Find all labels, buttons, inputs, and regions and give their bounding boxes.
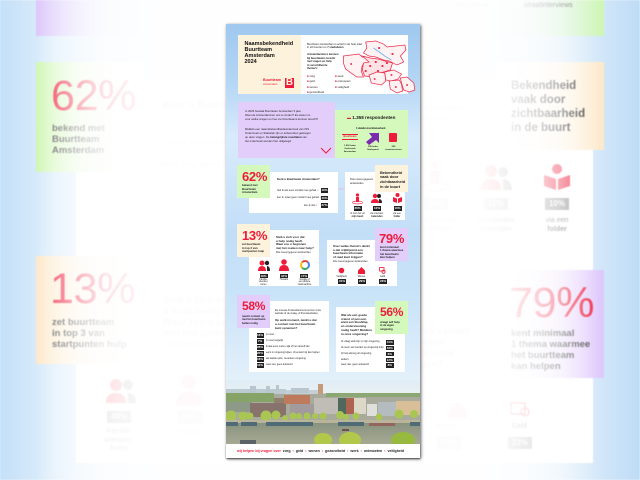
- response sources heading: 3 databronnen/kanaalverk: [356, 127, 386, 130]
- blurred background: woorden: [420, 116, 447, 123]
- question: of raad kunt krijgen?: [333, 255, 363, 259]
- panel: title: [238, 35, 301, 94]
- blurred background: mijn buurt: [422, 226, 453, 232]
- respondents count: ▬ 1.358 respondenten: [347, 115, 395, 120]
- panel: 79%: kent minimaal: [380, 244, 399, 248]
- background panel: 79%: kan helpen: [511, 361, 561, 372]
- labels: [350, 212, 365, 218]
- card: thema's: 23%: [380, 279, 386, 283]
- background panel: 62%: [36, 62, 145, 172]
- panel: 56%: vraagt zelf hulp: [380, 320, 400, 324]
- panel: map and themes: ■ gezondheid: [307, 90, 324, 94]
- card: thema's: Drie meest gegeven antwoorden: [333, 260, 368, 263]
- blurred background: Huisarts: [174, 428, 200, 435]
- card: contact opnemen: [249, 301, 329, 372]
- caption: Buurtteam: [242, 187, 256, 191]
- blurred background: Geld: [512, 423, 527, 430]
- heading: 2024: [244, 59, 257, 65]
- caption: bekend met: [242, 183, 258, 187]
- icon: geld: [379, 267, 386, 274]
- theme list: ■ ontmoeten: [335, 79, 351, 83]
- panel: map and themes: Amsterdammers kunnen: [307, 53, 339, 56]
- panel: 13%: 13%: [242, 228, 267, 242]
- footer tagline: [226, 444, 420, 458]
- source: stadspanel: Stadspanel: [367, 149, 379, 151]
- background panel: Bekendheid: zichtbaarheid: [511, 108, 585, 120]
- source: buurtteam: Buurtteam: [344, 135, 356, 138]
- source: straatinterviews: 300: [392, 146, 395, 148]
- icon: huisarts: [279, 259, 289, 271]
- blurred background: Drie meest gegeven antwoorden: [163, 341, 264, 348]
- card: kent u buurtteam: ken ik, maar geen contact mee gehad ✓: [277, 196, 322, 199]
- panel: intro: Middels een naamsbekendheidsonderzoek van OIS: [245, 126, 309, 130]
- intro: De meeste Amsterdammers kennen onze: [275, 309, 321, 312]
- panel: 79%: 79%: [379, 231, 404, 246]
- card: kent u buurtteam: 37%: [321, 203, 328, 207]
- source: buurtteam: Amsterdam: [344, 151, 356, 153]
- panel: 79%: 1 thema waarmee: [380, 248, 403, 252]
- panel: 79%: kan helpen: [380, 255, 395, 259]
- question: [341, 313, 372, 336]
- question: met het zoeken naar hulp?: [276, 246, 314, 250]
- connector line: [338, 188, 345, 190]
- panel: 13%: startpunten hulp: [242, 249, 264, 253]
- background panel: Bekendheid: vaak door: [511, 94, 565, 106]
- question: Op welk moment, denkt u dat: [275, 318, 317, 322]
- question: [333, 244, 370, 259]
- panel: 56%: [375, 301, 408, 334]
- badges: 16%: [321, 188, 328, 192]
- question: nodig heeft? Meldenu: [341, 328, 372, 332]
- question: u contact met het buurtteam: [275, 322, 315, 326]
- panel: intro: op deze vragen. De belangrijkste resultaten van: [245, 135, 307, 139]
- panel: map and themes: in verschillende: [307, 64, 327, 66]
- answer rows: 16%: [257, 333, 263, 337]
- card: startpunt hulp: Drie meest gegeven antwoorden: [276, 251, 311, 254]
- blurred background: Wonen: [437, 423, 459, 430]
- answer rows: heb ik wel eens contact mee gehad ✓: [277, 188, 319, 192]
- card: startpunt hulp: zoekmachine: [298, 284, 311, 286]
- card: thema's: Wonen: [358, 275, 365, 278]
- card: contact opnemen: 7%: [258, 339, 262, 343]
- background panel: 13%: zet buurtteam: [52, 317, 114, 328]
- card: kent u buurtteam: [249, 172, 338, 213]
- question: [275, 318, 317, 330]
- background panel: Bekendheid: [495, 62, 604, 150]
- blurred background: bekenden: [481, 226, 511, 232]
- card: hulp omgeving: Ik help alsnog uit omgeving: [341, 352, 371, 354]
- panel: 56%: in de eigen: [380, 324, 394, 327]
- panel: 58%: 58%: [242, 299, 265, 313]
- card: zichtbaarheid: via vrienden,: [370, 212, 384, 215]
- panel: 13%: [237, 224, 270, 257]
- card: zichtbaarheid: folder: [394, 215, 400, 218]
- blurred background: via vrienden,: [476, 217, 516, 224]
- background labels: Familie,: [107, 428, 131, 435]
- theme list: ■ zorg: [307, 74, 315, 78]
- answer rows: Ik vraag welk zijn in mijn omgeving: [341, 340, 380, 343]
- card: contact opnemen: als laatste optie, na andere omgeving: [266, 357, 306, 360]
- question: u hulp nodig heeft.: [276, 239, 303, 243]
- background panel: 79%: 1 thema waarmee: [511, 339, 590, 350]
- panel: 79%: het buurtteam: [380, 252, 399, 256]
- background panel: 79%: 79%: [509, 279, 594, 327]
- photo: Amsterdam skyline: [226, 380, 420, 444]
- logo: Buurtteam: [263, 78, 281, 82]
- icon: folder: [393, 193, 402, 203]
- question: Waar zou u beginnen: [276, 242, 306, 246]
- background text: questions: Kent u Buurtteam Amsterdam?: [163, 100, 310, 111]
- labels: Familie,: [259, 278, 268, 280]
- question: kunt opnemen?: [275, 326, 297, 330]
- card: kent u buurtteam: 46%: [321, 196, 328, 200]
- background panel: 13%: startpunten hulp: [52, 339, 127, 350]
- blurred background: heb ik wel eens contact mee gehad: [168, 139, 278, 146]
- background badges: 49%: [111, 412, 127, 421]
- logo: [263, 77, 294, 88]
- card: zichtbaarheid: via een: [393, 212, 401, 215]
- card: startpunt hulp: [249, 230, 319, 286]
- question: en ondersteuning: [341, 324, 366, 328]
- source: stadspanel: 398 leden: [368, 146, 378, 148]
- card: contact opnemen: eerst in omgeving kijken, of iemand mij kan helpen: [266, 351, 320, 354]
- logo: Amsterdam: [263, 82, 277, 86]
- blurred background: meest gegeven: [420, 105, 468, 112]
- card: hulp omgeving: 41%: [387, 340, 393, 344]
- panel: 79%: [375, 228, 408, 261]
- theme list: ■ geld: [307, 79, 315, 83]
- source: stadspanel: [366, 133, 379, 151]
- answer note: antwoorden: [350, 182, 364, 185]
- badges: 36%: [354, 206, 360, 210]
- intro paragraphs: In 2024 bestaat Buurtteam Amsterdam 5 jaar.: [245, 108, 301, 112]
- caption: [242, 183, 258, 194]
- blurred background: Stelt u zich voor dat: [163, 295, 253, 306]
- theme list: ■ wonen: [307, 85, 318, 89]
- panel: bekendheid: [375, 165, 408, 192]
- background panel: 79%: het buurtteam: [511, 350, 574, 361]
- blurred background: met het zoeken?: [163, 328, 237, 339]
- badges: 31%: [339, 279, 345, 283]
- blurred background: ma's denkt: [420, 326, 469, 337]
- blurred background: 23%: [512, 438, 528, 447]
- background panel: 13%: in top 3 van: [52, 328, 105, 339]
- intro text: Buurtteam Amsterdam is actief in de hele stad: [307, 42, 362, 46]
- stat: 62%: [242, 168, 267, 184]
- labels: Ik zien het uit: [350, 212, 365, 215]
- icon: zien in buurt: [352, 193, 363, 204]
- theme list: ■ werk: [335, 74, 343, 78]
- card: zichtbaarheid: 12%: [374, 206, 380, 210]
- background labels: vrienden,: [105, 436, 133, 444]
- panel: bekendheid: vaak door: [380, 174, 398, 179]
- question: Wat als een goede: [341, 313, 367, 317]
- badges: 49%: [260, 274, 266, 278]
- question: vriend of persoon: [341, 317, 366, 321]
- panel: 62%: [237, 165, 270, 198]
- heading: Amsterdam: [244, 53, 275, 59]
- source: straatinterviews: straatinterviews: [385, 149, 402, 151]
- caption: Amsterdam: [242, 190, 257, 194]
- card: zichtbaarheid: 10%: [394, 206, 400, 210]
- blurred background: Stadspanel: [453, 2, 488, 9]
- panel: 58%: met het buurtteam: [242, 318, 265, 321]
- map of Amsterdam: [342, 40, 416, 94]
- background panel: Bekendheid: in de buurt: [511, 122, 570, 134]
- background white cards: [76, 80, 593, 463]
- card: contact opnemen: weet niet, geen antwoord: [266, 363, 293, 366]
- card: startpunt hulp: 34%: [281, 274, 287, 278]
- panel: map and themes: thema's:: [307, 67, 318, 70]
- panel: intro: [238, 102, 335, 158]
- source: buurtteam: 1.000 leden: [344, 145, 356, 147]
- blurred background: folder: [547, 226, 567, 232]
- card: startpunt hulp: Huisarts: [280, 278, 288, 280]
- blurred background: zien het uit: [422, 217, 456, 224]
- answer note: Drie meest gegeven: [350, 178, 373, 181]
- intro: [275, 309, 321, 315]
- background panel: 62%: Amsterdam: [52, 145, 104, 156]
- source: buurtteam: Onderzoek: [344, 148, 356, 150]
- background panel: 62%: Buurtteam: [52, 134, 100, 145]
- background panel: 62%: 62%: [51, 72, 136, 120]
- badges: [338, 279, 346, 284]
- panel: 56%: 56%: [380, 305, 403, 319]
- panel: 58%: neemt contact op: [242, 314, 264, 318]
- background panel: green strip: [484, 0, 604, 36]
- question: want een klus/klap,: [341, 320, 368, 324]
- card: contact opnemen: zo snel...: [266, 333, 276, 336]
- question: u dat vrijblijvend een: [333, 248, 363, 252]
- blurred background: gen?: [420, 359, 443, 370]
- badges: [260, 274, 268, 278]
- question: buurtteam informatie: [333, 251, 363, 255]
- labels: Veiligheid: [336, 275, 347, 278]
- intro text: [307, 42, 362, 49]
- icon: wonen: [358, 267, 365, 274]
- panel: bekendheid: in de buurt: [380, 184, 400, 189]
- panel: map and themes: bij buurtteams terecht: [307, 56, 335, 60]
- panel: 58%: [237, 295, 270, 328]
- labels: buren: [261, 284, 266, 286]
- panel: map and themes: met vragen en hulp: [307, 60, 332, 63]
- card: thema's: 29%: [359, 279, 365, 283]
- source: straatinterviews: [385, 133, 402, 151]
- blurred background: ken ik, maar geen contact mee gehad: [160, 162, 277, 169]
- card: contact opnemen: 18%: [257, 357, 263, 361]
- panel: respondents: [335, 110, 408, 158]
- theme list: ■ veiligheid: [335, 85, 349, 89]
- card: contact opnemen: 28%: [257, 345, 263, 349]
- blurred background: straatinterviews: [524, 2, 573, 9]
- card: zichtbaarheid: [345, 172, 405, 220]
- answer note: [350, 178, 374, 185]
- panel: bekendheid: Bekendheid: [380, 170, 402, 174]
- panel: map and themes: [301, 35, 408, 94]
- card: contact opnemen: zo snel mogelijk: [266, 339, 283, 342]
- background labels: buren: [110, 445, 128, 452]
- card: contact opnemen: ik laat even rusten, kijk of het vanzelf lukt: [266, 345, 309, 348]
- intro text: in 22 buurten en 7 stadsdelen: [307, 46, 343, 49]
- background panel: 62%: bekend met: [52, 123, 105, 134]
- blurred background: tteam: [420, 337, 445, 348]
- heading: [244, 41, 293, 65]
- card: hulp omgeving: weet niet, geen antwoord: [341, 363, 369, 366]
- question: Stelt u zich voor dat: [276, 235, 305, 239]
- labels: [258, 278, 268, 286]
- heading: Buurtteam: [244, 47, 272, 53]
- intro: website of de vraag- of themawebsites.: [275, 312, 318, 315]
- background panel: 79%: [495, 270, 604, 378]
- card: hulp omgeving: Ik neem wel contact op omgeving hulp: [341, 346, 384, 348]
- footer tagline: wij helpen bij vragen over zorg ▪ geld ▪ wonen ▪ gezondheid ▪ werk ▪ ontmoeten ▪ veiligheid: [237, 449, 404, 453]
- card: kent u buurtteam: ken ik niet ×: [304, 204, 317, 206]
- panel: 13%: zet buurtteam: [242, 242, 260, 246]
- question: Kent u Buurtteam Amsterdam?: [277, 176, 320, 180]
- labels: mijn buurt: [352, 215, 363, 218]
- panel: intro: het onderzoek worden hier uitlgelegd.: [245, 139, 292, 143]
- panel: intro: Onderzoek en Statistiek zijn er antwoorden gekregen: [245, 131, 311, 135]
- background panel: purple strip: [36, 0, 156, 36]
- card: hulp omgeving: 12%: [387, 358, 393, 362]
- blurred background: 12%: [488, 199, 504, 208]
- card: zichtbaarheid: bekenden: [371, 215, 383, 218]
- badges: [354, 206, 362, 210]
- blurred background: 34%: [182, 412, 198, 421]
- icon: google: [300, 260, 310, 270]
- card: hulp omgeving: 8%: [388, 363, 392, 367]
- background panel: 13%: 13%: [50, 265, 135, 313]
- card: thema's: Geld: [380, 275, 385, 278]
- background badges: [107, 411, 131, 423]
- question: [276, 235, 314, 250]
- icon: familie: [258, 260, 270, 271]
- intro paragraphs: voor welke vragen en hoe met buurtteams kunnen terecht?: [245, 117, 318, 121]
- blurred background: via een: [546, 217, 568, 224]
- source: buurtteam: [342, 134, 358, 153]
- card: contact opnemen: 11%: [257, 363, 263, 367]
- background labels: [105, 428, 133, 452]
- card: startpunt hulp: Google of: [300, 278, 309, 280]
- blurred background: Waar zou u beginnen: [163, 317, 258, 328]
- infographic card: [226, 24, 420, 458]
- card: hulp omgeving: [336, 307, 405, 372]
- icon: veiligheid: [338, 268, 344, 274]
- blurred background: 10%: [549, 199, 565, 208]
- panel: bekendheid: zichtbaarheid: [380, 179, 405, 184]
- intro paragraphs: Weet de Amsterdammer ons te vinden? En weten ze: [245, 113, 310, 117]
- icon: vrienden: [371, 194, 382, 203]
- panel: 58%: bellen nodig: [242, 322, 258, 324]
- panel: 13%: in top 3 van: [242, 246, 258, 250]
- background panel: 79%: kent minimaal: [511, 328, 574, 339]
- icon: chevron: [320, 148, 332, 154]
- blurred background: ormatie: [420, 348, 454, 359]
- question: in onze omgeving?: [341, 332, 368, 336]
- card: hulp omgeving: 33%: [387, 346, 393, 350]
- blurred background: 29%: [441, 438, 457, 447]
- blurred background: 36%: [428, 199, 444, 208]
- heading: Naamsbekendheid: [244, 41, 293, 47]
- intro paragraphs: [245, 108, 318, 121]
- card: startpunt hulp: een andere: [299, 281, 310, 283]
- panel: 56%: omgeving: [380, 328, 393, 330]
- background panel: 13%: [36, 256, 145, 364]
- blurred background: u hulp nodig heeft.: [163, 306, 248, 317]
- card: contact opnemen: 20%: [257, 351, 263, 355]
- logo: B: [286, 77, 293, 88]
- labels: vrienden,: [259, 281, 268, 283]
- card: hulp omgeving: 6%: [388, 352, 392, 356]
- background panel: Bekendheid: Bekendheid: [511, 80, 576, 92]
- question: Over welke thema's denkt: [333, 244, 370, 248]
- theme list: [307, 74, 351, 94]
- card: startpunt hulp: 17%: [301, 274, 307, 278]
- card: hulp omgeving: anders: [341, 358, 349, 360]
- card: thema's: [327, 240, 397, 286]
